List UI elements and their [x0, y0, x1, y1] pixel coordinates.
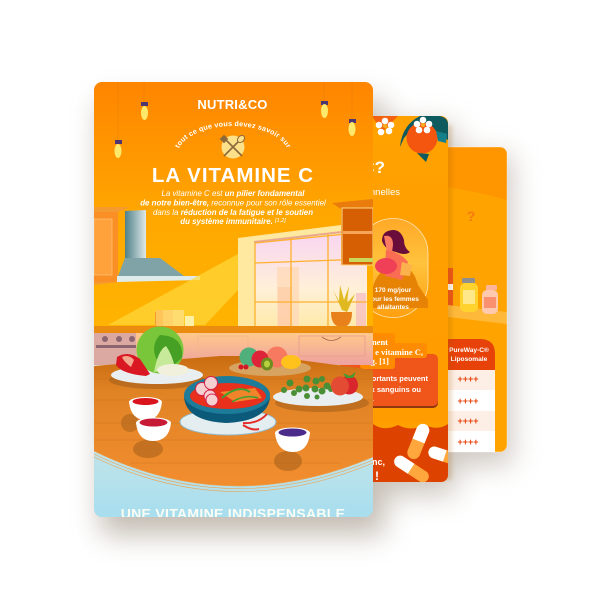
- table column: ++++: [457, 396, 479, 406]
- top dark arc: [448, 147, 507, 200]
- sunlight beam: [108, 254, 238, 325]
- text labels: g. [1]: [371, 356, 389, 366]
- callout: [340, 354, 438, 408]
- icon: red pepper: [116, 354, 150, 376]
- bottom scalloped band with capsules: !: [375, 469, 379, 483]
- panel: middle card, needs: [336, 116, 448, 482]
- panel: front card, la vitamine C: [94, 82, 373, 517]
- icon: capsules: [394, 424, 448, 482]
- intro paragraph: de notre bien-être, reconnue pour son rôle essentiel: [140, 198, 326, 208]
- text labels: e vitamine C,: [375, 347, 423, 357]
- bowl of stew: [180, 376, 276, 435]
- logo: NUTRI&CO: [197, 97, 268, 112]
- table: [94, 356, 373, 500]
- bottom blue band: [94, 451, 373, 522]
- intro paragraph: [140, 189, 326, 226]
- subheading fragment: nnelles: [370, 187, 400, 198]
- upper cabinet left: [94, 207, 130, 285]
- callout: .: [372, 394, 374, 403]
- icon: breastfeeding woman: [373, 230, 428, 308]
- card shadows: [100, 100, 512, 535]
- icon: orange and blossoms: [372, 116, 448, 162]
- back card outline: [400, 147, 507, 452]
- bottom scalloped band with capsules: [373, 424, 448, 482]
- intro paragraph: du système immunitaire.: [180, 217, 273, 226]
- table column: ++++: [457, 437, 479, 447]
- icon: potted plant: [331, 285, 355, 327]
- plate: broccoli and tomato: [273, 372, 369, 412]
- icon: supplement bottles: [448, 268, 507, 324]
- icon: cooker hood: [117, 210, 200, 282]
- small bowls: [121, 397, 310, 471]
- panel: breastfeeding requirement: allaitantes: [377, 304, 409, 311]
- table column: ++++: [457, 416, 479, 426]
- window: [238, 225, 367, 327]
- question mark: ?: [467, 208, 475, 224]
- panel: breastfeeding requirement: 170 mg/jour: [375, 287, 412, 294]
- callout: ux sanguins ou: [366, 385, 421, 394]
- text labels: [360, 333, 427, 369]
- icon: fork and spoon: [220, 134, 246, 158]
- table column: Liposomale: [451, 356, 488, 363]
- wall: [94, 82, 373, 332]
- icon: pendant bulbs: [114, 82, 356, 158]
- title: LA VITAMINE C: [152, 164, 314, 187]
- lower cabinets and stove: [94, 333, 373, 365]
- panel: breastfeeding requirement: pour les femmes: [367, 296, 419, 303]
- icon: cabbage: [136, 326, 184, 374]
- section heading: UNE VITAMINE INDISPENSABLE: [121, 506, 345, 522]
- heading fragment: C?: [362, 158, 385, 177]
- panel: back card, comparison table: [448, 147, 507, 452]
- panel: breastfeeding requirement: [373, 218, 428, 318]
- counter top: [94, 326, 373, 333]
- intro paragraph: dans la réduction de la fatigue et le soutien: [153, 208, 313, 217]
- table column: ++++: [457, 374, 479, 384]
- card shadow between cards: [444, 125, 452, 480]
- bottom scalloped band with capsules: nc,: [372, 457, 385, 467]
- arched tagline: tout ce que vous devez savoir sur: [175, 120, 290, 148]
- callout: portants peuvent: [367, 374, 428, 383]
- icon: cauliflower: [157, 364, 189, 376]
- intro paragraph: La vitamine C est un pilier fondamental: [162, 189, 305, 198]
- plate: fruit: [229, 346, 311, 376]
- table column: [448, 339, 495, 452]
- table column: PureWay-C®: [449, 346, 489, 354]
- upper cabinet right: [332, 199, 373, 265]
- intro paragraph: [1,2]: [274, 218, 286, 224]
- icon: canisters: [155, 310, 194, 326]
- plate: vegetables: [109, 326, 205, 389]
- text labels: nent: [372, 337, 388, 347]
